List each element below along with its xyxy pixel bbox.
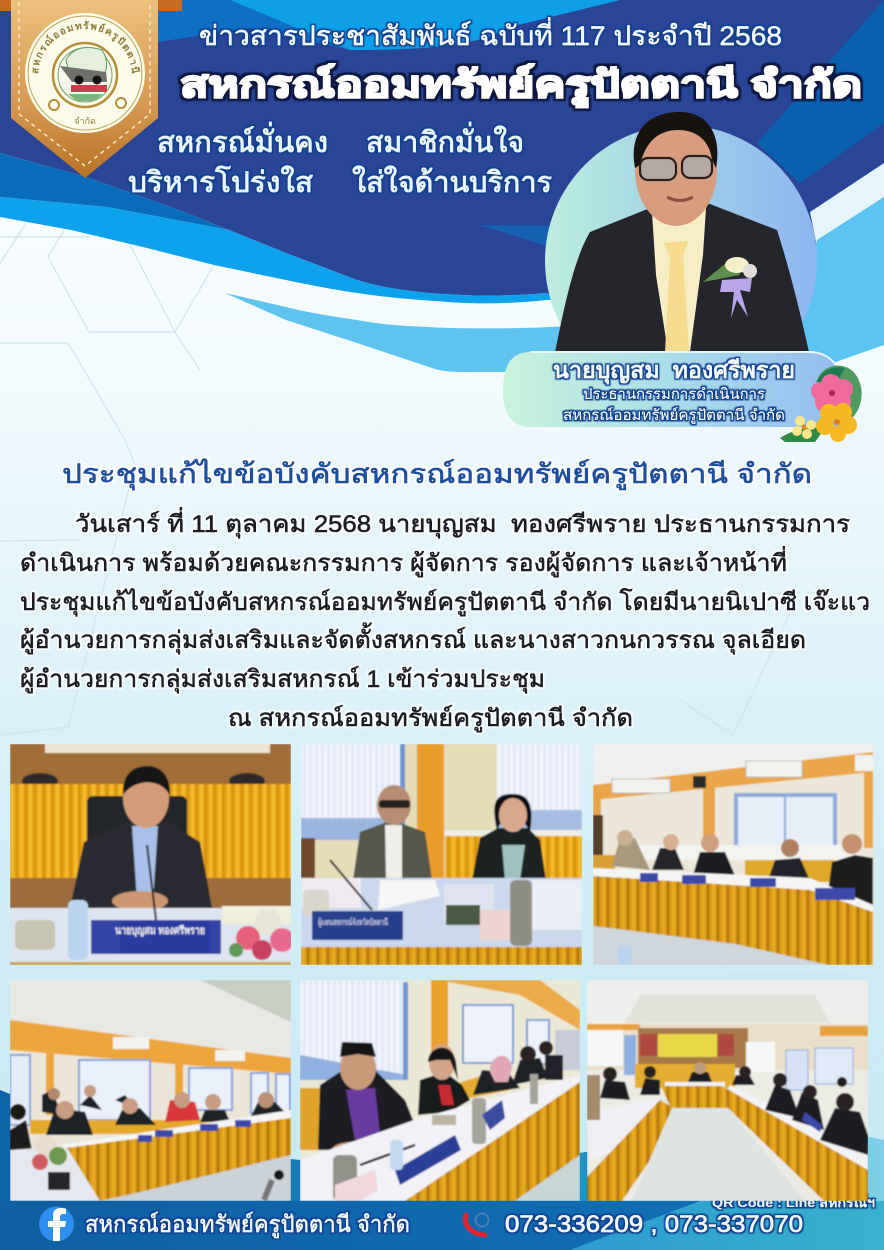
corsage bbox=[703, 257, 757, 318]
photo 2: two committee members bbox=[301, 744, 582, 965]
photo 4: long table left view bbox=[10, 980, 291, 1201]
left cyan wave bbox=[0, 197, 560, 303]
phone numbers: 073-336209 , 073-337070 bbox=[505, 1211, 803, 1238]
right blue wedge bbox=[757, 0, 884, 183]
article body bbox=[20, 507, 870, 733]
logo ribbon bbox=[0, 0, 182, 178]
right sky-blue panel bbox=[790, 197, 884, 364]
photo 1: chairman at table bbox=[10, 744, 291, 965]
article body: ดำเนินการ พร้อมด้วยคณะกรรมการ ผู้จัดการ รองผู้จัดการ และเจ้าหน้าที่ bbox=[20, 546, 787, 578]
logo seal: จำกัด bbox=[74, 116, 96, 126]
main title: สหกรณ์ออมทรัพย์ครูปัตตานี จำกัด bbox=[180, 64, 862, 108]
head bbox=[634, 112, 717, 226]
photo 5: close view along table bbox=[300, 980, 580, 1201]
president portrait bbox=[545, 112, 817, 397]
logo seal bbox=[25, 13, 145, 133]
header waves bbox=[0, 0, 884, 372]
logo seal: สหกรณ์ออมทรัพย์ครูปัตตานี bbox=[32, 20, 140, 74]
darker tint near portrait bbox=[479, 225, 560, 250]
article body: ผู้อำนวยการกลุ่มส่งเสริมและจัดตั้งสหกรณ์ และนางสาวกนกวรรณ จุลเอียด bbox=[20, 622, 806, 655]
slogans: สหกรณ์มั่นคง bbox=[157, 122, 328, 159]
article body: วันเสาร์ ที่ 11 ตุลาคม 2568 นายบุญสม ทองศรีพราย ประธานกรรมการ bbox=[75, 507, 850, 539]
president role: ประธานกรรมการดำเนินการ bbox=[583, 386, 765, 403]
article body: ผู้อำนวยการกลุ่มส่งเสริมสหกรณ์ 1 เข้าร่วมประชุม bbox=[20, 665, 545, 694]
slogans: ใส่ใจด้านบริการ bbox=[352, 165, 552, 199]
icon: facebook bbox=[39, 1206, 74, 1242]
ribbon top tab bbox=[0, 0, 182, 11]
slogans: บริหารโปร่งใส bbox=[128, 165, 313, 199]
footer bar bbox=[0, 1195, 884, 1250]
gold shield bbox=[11, 0, 158, 178]
photo 2: two committee members: ผู้แทนสหกรณ์จังหวัดปัตตานี bbox=[318, 916, 388, 928]
right pale band bbox=[810, 163, 884, 247]
icon: phone bbox=[465, 1214, 488, 1235]
QR code caption: QR Code : Line สหกรณ์ฯ bbox=[712, 1195, 875, 1210]
article body: ประชุมแก้ไขข้อบังคับสหกรณ์ออมทรัพย์ครูปัตตานี จำกัด โดยมีนายนิเปาซี เจ๊ะแว bbox=[20, 588, 870, 617]
hexagon line pattern bbox=[0, 225, 884, 1070]
suit bbox=[555, 204, 809, 352]
tie bbox=[664, 241, 689, 352]
shirt bbox=[652, 208, 706, 352]
flower decoration bbox=[780, 366, 862, 442]
photo 3: meeting room view bbox=[593, 744, 874, 965]
top sky-blue wave bbox=[158, 0, 620, 50]
slogans: สมาชิกมั่นใจ bbox=[366, 122, 524, 159]
facebook page name: สหกรณ์ออมทรัพย์ครูปัตตานี จำกัด bbox=[85, 1211, 410, 1238]
organisation name: สหกรณ์ออมทรัพย์ครูปัตตานี จำกัด bbox=[563, 407, 785, 424]
photo 6: U-shaped table overview bbox=[587, 980, 868, 1201]
article body: ณ สหกรณ์ออมทรัพย์ครูปัตตานี จำกัด bbox=[228, 704, 633, 733]
name pill bbox=[503, 352, 845, 427]
left mid-blue wave bbox=[0, 153, 229, 230]
article heading: ประชุมแก้ไขข้อบังคับสหกรณ์ออมทรัพย์ครูปัตตานี จำกัด bbox=[62, 458, 812, 491]
newsletter issue line: ข่าวสารประชาสัมพันธ์ ฉบับที่ 117 ประจำปี 2568 bbox=[199, 17, 782, 51]
president name: นายบุญสม ทองศรีพราย bbox=[553, 357, 795, 385]
lower light-blue swoosh bbox=[225, 293, 570, 372]
slogans bbox=[128, 122, 552, 199]
photo 1: chairman at table: นายบุญสม ทองศรีพราย bbox=[115, 924, 205, 938]
